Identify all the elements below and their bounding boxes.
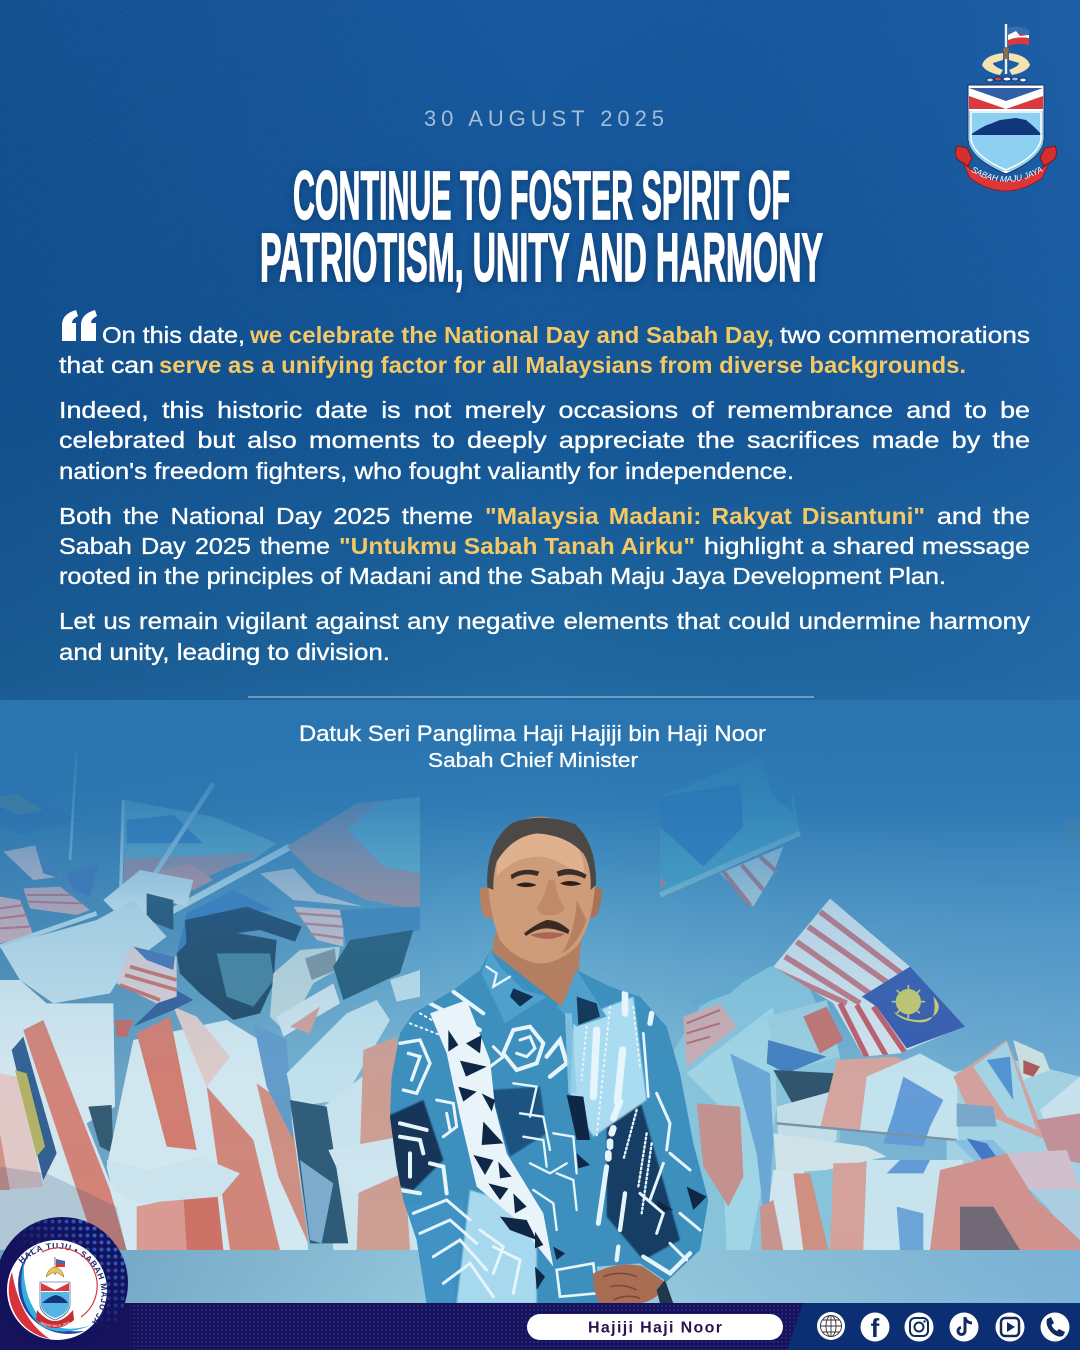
small coat of arms: SABAH MAJU JAYA	[40, 1322, 70, 1327]
icon: instagram	[904, 1312, 934, 1342]
icon: tiktok	[950, 1312, 978, 1342]
message paragraph 3: Sabah Day 2025 theme	[59, 533, 330, 559]
message paragraph 3: and the	[937, 503, 1030, 529]
white triangle band	[430, 1000, 553, 1267]
message paragraph 4: Let us remain vigilant against any negative elements that could undermine harmony	[59, 608, 1031, 634]
icon: website globe	[817, 1312, 845, 1340]
signatory: Sabah Chief Minister	[428, 749, 638, 772]
photo: flags right	[660, 757, 1080, 1250]
swoosh	[18, 1244, 85, 1334]
flag pole and flag	[1006, 24, 1029, 74]
message paragraph 3: "Untukmu Sabah Tanah Airku"	[339, 533, 695, 559]
title	[260, 157, 823, 296]
message paragraph 4: and unity, leading to division.	[59, 639, 390, 665]
icon: facebook: f	[871, 1313, 880, 1343]
head	[480, 817, 602, 963]
coat of arms top right	[955, 24, 1057, 192]
shirt	[380, 947, 720, 1307]
signatory	[299, 721, 766, 772]
icon: phone	[1040, 1312, 1070, 1342]
icon: quotation mark	[62, 310, 97, 341]
social icons	[817, 1312, 1070, 1343]
message paragraph 2: celebrated but also moments to deeply appreciate the sacrifices made by the	[59, 427, 1030, 453]
message paragraph 1: On this date,	[102, 322, 245, 348]
message paragraph 3: "Malaysia Madani: Rakyat Disantuni"	[485, 503, 925, 529]
campaign logo bottom left	[0, 1217, 128, 1340]
message paragraph 1: serve as a unifying factor for all Malaysians from diverse backgrounds.	[159, 352, 966, 378]
message paragraph 2: Indeed, this historic date is not merely occasions of remembrance and to be	[59, 397, 1030, 423]
date: 30 AUGUST 2025	[424, 106, 664, 131]
ribbon	[955, 145, 1057, 192]
arms	[982, 53, 1030, 75]
message paragraph 2	[59, 397, 1030, 484]
message paragraph 3: rooted in the principles of Madani and the Sabah Maju Jaya Development Plan.	[59, 563, 946, 589]
icon: youtube play	[996, 1312, 1024, 1342]
footer bar	[0, 1303, 1080, 1350]
name pill: Hajiji Haji Noor	[588, 1320, 722, 1336]
hands	[593, 1264, 673, 1304]
shield	[968, 85, 1044, 174]
photo: crowd left	[0, 750, 420, 1250]
message paragraph 3: Both the National Day 2025 theme	[59, 503, 473, 529]
neck	[492, 933, 582, 1010]
message paragraph 3	[59, 503, 1030, 589]
placket and chest pattern	[400, 967, 700, 1297]
ribbon: SABAH MAJU JAYA	[971, 166, 1043, 182]
message paragraph 1	[59, 322, 1030, 378]
beads	[986, 77, 1026, 82]
icon: facebook	[860, 1312, 890, 1343]
photo wash fade	[0, 700, 1080, 1303]
collar	[482, 950, 547, 1023]
message paragraph 3: highlight a shared message	[704, 533, 1030, 559]
message paragraph 1: that can	[59, 352, 154, 378]
message paragraph 2: nation's freedom fighters, who fought valiantly for independence.	[59, 458, 794, 484]
portrait: man in batik shirt	[380, 817, 720, 1307]
signatory: Datuk Seri Panglima Haji Hajiji bin Haji Noor	[299, 721, 766, 746]
name pill	[527, 1314, 783, 1340]
message paragraph 1: we celebrate the National Day and Sabah Day,	[249, 322, 774, 348]
message paragraph 1: two commemorations	[780, 322, 1030, 348]
small coat of arms	[36, 1257, 74, 1328]
message paragraph 4	[59, 608, 1031, 665]
